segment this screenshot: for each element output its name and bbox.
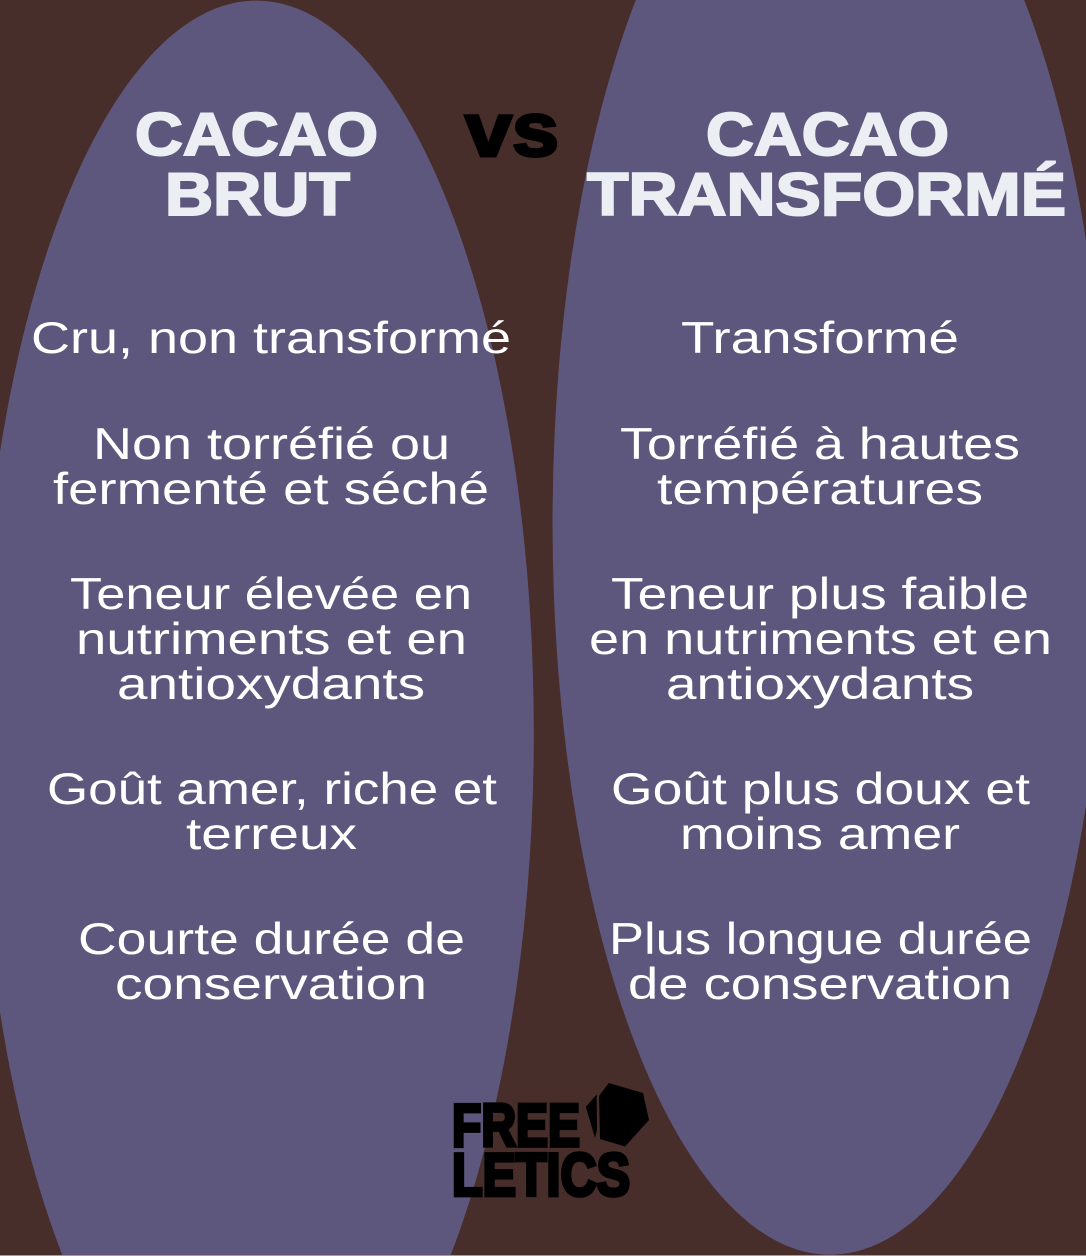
- left purple ellipse: [0, 1, 534, 1256]
- left column: raw cacao properties: antioxydants: [117, 660, 425, 709]
- right column: processed cacao properties: Teneur plus faible: [611, 570, 1029, 619]
- left column: raw cacao properties: nutriments et en: [76, 615, 467, 664]
- bottom edge line: [0, 1255, 1086, 1256]
- heading: cacao transformé: TRANSFORMÉ: [587, 161, 1066, 228]
- left column: raw cacao properties: fermenté et séché: [53, 465, 489, 514]
- right column: processed cacao properties: de conservation: [628, 960, 1012, 1009]
- right column: processed cacao properties: antioxydants: [666, 660, 974, 709]
- logo: Freeletics: [452, 1083, 649, 1208]
- right column: processed cacao properties: températures: [657, 465, 983, 514]
- heading: cacao brut: BRUT: [165, 161, 350, 228]
- right column: processed cacao properties: [589, 314, 1052, 1009]
- logo: Freeletics: FREE: [452, 1092, 580, 1159]
- left column: raw cacao properties: Goût amer, riche et: [47, 765, 498, 814]
- right column: processed cacao properties: Plus longue durée: [609, 915, 1032, 964]
- right column: processed cacao properties: Transformé: [681, 314, 959, 363]
- left column: raw cacao properties: conservation: [115, 960, 427, 1009]
- heading: vs: vs: [465, 88, 559, 173]
- right purple ellipse: [553, 0, 1086, 1255]
- left column: raw cacao properties: [31, 314, 511, 1009]
- right column: processed cacao properties: moins amer: [680, 810, 960, 859]
- right column: processed cacao properties: en nutriments et en: [589, 615, 1052, 664]
- logo: Freeletics: LETICS: [452, 1142, 630, 1208]
- left column: raw cacao properties: Non torréfié ou: [93, 420, 450, 469]
- heading: cacao transformé: CACAO: [706, 101, 949, 168]
- right column: processed cacao properties: Torréfié à hautes: [620, 420, 1020, 469]
- left column: raw cacao properties: Courte durée de: [78, 915, 465, 964]
- heading: cacao brut: CACAO: [135, 101, 378, 168]
- heading: cacao transformé: [587, 101, 1066, 228]
- heading: cacao brut: [135, 101, 378, 228]
- left column: raw cacao properties: Cru, non transformé: [31, 314, 511, 363]
- right column: processed cacao properties: Goût plus doux et: [611, 765, 1031, 814]
- left column: raw cacao properties: terreux: [186, 810, 357, 859]
- left column: raw cacao properties: Teneur élevée en: [70, 570, 472, 619]
